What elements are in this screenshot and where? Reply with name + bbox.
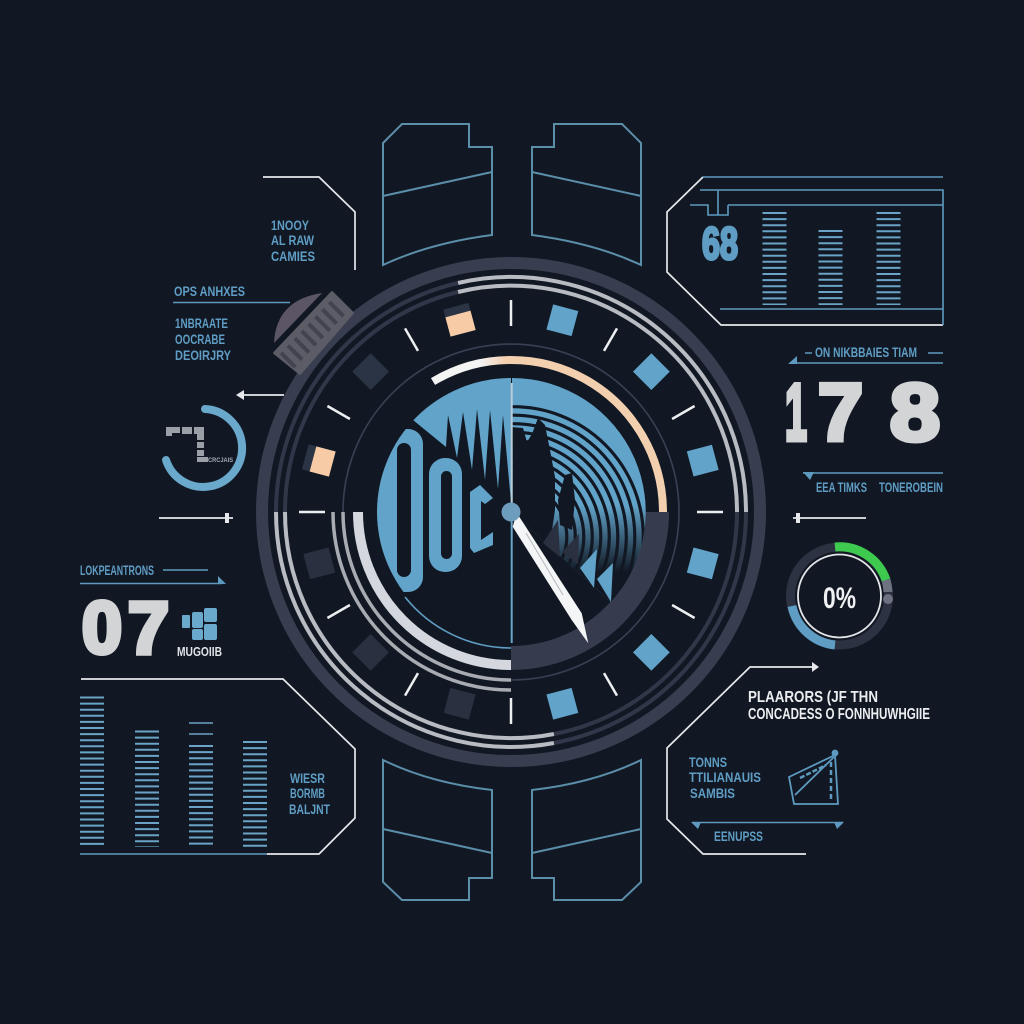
watch dial bbox=[262, 263, 760, 761]
right tick line bbox=[793, 513, 866, 523]
inner silver arcs bbox=[333, 512, 511, 690]
text block: DEOIRJRY bbox=[175, 348, 231, 363]
callout: left labels bbox=[173, 284, 290, 363]
strap: top left bbox=[383, 124, 492, 265]
text block bbox=[271, 218, 315, 264]
gray arc bbox=[886, 580, 888, 592]
center hub bbox=[502, 502, 520, 522]
panel: top right bar chart bbox=[667, 177, 943, 325]
big digits: 0 bbox=[82, 588, 122, 669]
big digits bbox=[82, 588, 169, 669]
text block bbox=[289, 771, 331, 817]
text block bbox=[175, 316, 231, 363]
arrow: left pointing bbox=[236, 390, 284, 400]
big digits bbox=[785, 368, 940, 458]
bars bbox=[92, 696, 255, 847]
left gauge bbox=[166, 409, 242, 487]
watch crown bbox=[274, 292, 353, 374]
percent text: 0% bbox=[823, 582, 856, 615]
thin blue arc bbox=[405, 597, 511, 648]
panel: lower right callout bbox=[667, 662, 930, 854]
big digits: 1 bbox=[785, 368, 807, 458]
stat: 17 8 bbox=[785, 345, 943, 495]
text block: 1NBRAATE bbox=[175, 316, 228, 331]
caption: EEA TIMKS bbox=[816, 480, 867, 495]
callout: top left frame bbox=[263, 177, 355, 270]
watch hand bbox=[513, 513, 588, 643]
text block: OOCRABE bbox=[175, 332, 225, 347]
text block: WIESR bbox=[290, 771, 325, 786]
green arc bbox=[835, 547, 886, 580]
silver quadrant arc bbox=[358, 512, 511, 665]
dark quadrant arc bbox=[511, 512, 657, 658]
stat: 17 8: ON NIKBBAIES TIAM bbox=[815, 345, 917, 360]
face shards bbox=[543, 520, 560, 557]
icon: window panes bbox=[182, 608, 217, 640]
icon: set square bbox=[789, 750, 838, 804]
right face ring sector bbox=[512, 378, 646, 602]
inner ring bbox=[798, 554, 881, 638]
stat: 07: LOKPEANTRONS bbox=[80, 563, 154, 578]
caption bbox=[816, 480, 943, 495]
heading text bbox=[748, 689, 930, 723]
caption: MUGOIIB bbox=[177, 644, 222, 659]
bezel dark arcs bbox=[276, 283, 746, 743]
hour markers bbox=[302, 303, 719, 720]
small silhouette bbox=[558, 473, 575, 530]
left gauge: CRCJAIS bbox=[208, 458, 233, 464]
caption: TONEROBEIN bbox=[879, 480, 943, 495]
text block: TTILIANAUIS bbox=[689, 770, 761, 785]
left tick line bbox=[159, 513, 233, 523]
short bar stubs bbox=[189, 723, 213, 734]
caption: EENUPSS bbox=[714, 829, 763, 844]
text block: CAMIES bbox=[271, 249, 315, 264]
strap: top right bbox=[532, 124, 641, 265]
value 68: 68 bbox=[702, 218, 738, 269]
callout: left labels: OPS ANHXES bbox=[174, 284, 245, 299]
text block: TONNS bbox=[689, 755, 727, 770]
big digits: 8 bbox=[890, 368, 940, 458]
gauge glyph bbox=[166, 427, 208, 462]
text block: AL RAW bbox=[271, 233, 314, 248]
heading text: PLAARORS (JF THN bbox=[748, 689, 878, 706]
text block: 1NOOY bbox=[271, 218, 309, 233]
big digits: 7 bbox=[128, 588, 169, 669]
bezel silver arcs bbox=[276, 277, 746, 747]
strap: bottom left bbox=[383, 760, 492, 900]
text block: SAMBIS bbox=[690, 786, 735, 801]
left face letter shapes bbox=[377, 378, 511, 592]
text block bbox=[689, 755, 761, 801]
center vertical line bbox=[511, 383, 513, 643]
silhouette figure bbox=[511, 418, 555, 543]
white to peach arc bbox=[433, 360, 663, 512]
bars bbox=[774, 212, 888, 305]
strap: bottom right bbox=[532, 760, 641, 900]
big digits: 7 bbox=[818, 368, 863, 458]
blue arc bbox=[792, 606, 835, 645]
knob bbox=[883, 594, 893, 604]
infographic canvas bbox=[80, 123, 944, 901]
hour ticks bbox=[299, 300, 723, 724]
heading text: CONCADESS O FONNHUWHGIIE bbox=[748, 706, 930, 723]
text block: BALJNT bbox=[289, 802, 331, 817]
panel: lower left bar chart bbox=[80, 679, 355, 854]
outer bezel ring bbox=[262, 263, 760, 761]
stat: 07 bbox=[80, 563, 226, 669]
dial face artwork bbox=[377, 378, 646, 602]
text block: BORMB bbox=[290, 786, 325, 801]
donut gauge bbox=[790, 547, 893, 645]
bracket line bbox=[691, 822, 844, 829]
inner thin ring bbox=[343, 344, 679, 680]
